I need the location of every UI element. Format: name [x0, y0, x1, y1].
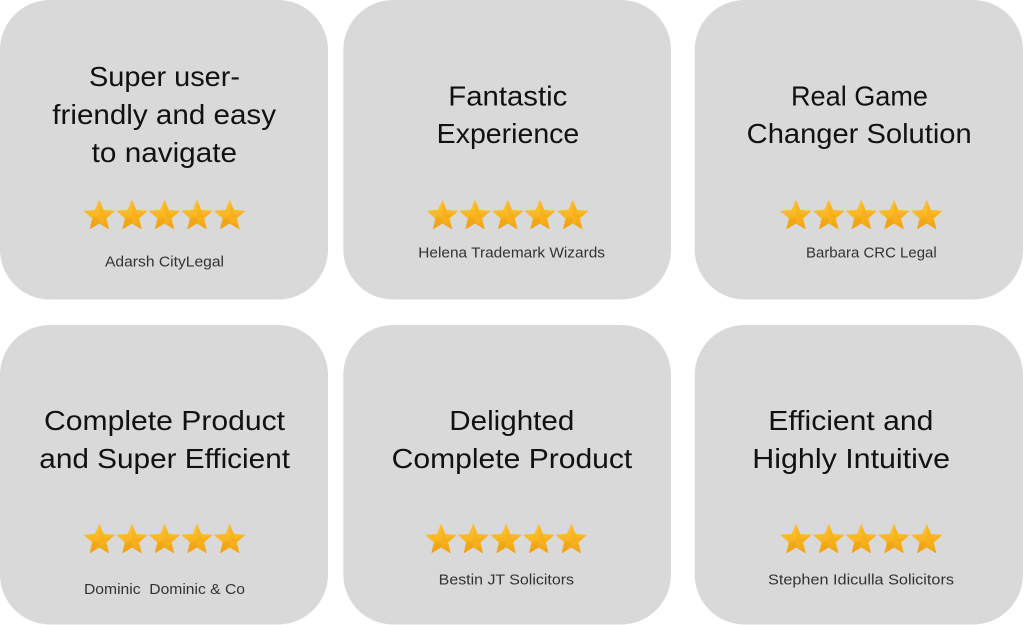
panel: review card 1	[0, 0, 328, 300]
heading: Delighted Complete Product: Delighted	[449, 405, 574, 436]
heading: Real Game Changer Solution: Changer Solution	[747, 118, 972, 149]
panel: review card 6	[695, 325, 1023, 624]
card background	[0, 325, 328, 624]
panel: review card 4	[0, 325, 328, 624]
icon: five star rating	[84, 524, 245, 553]
heading: Real Game Changer Solution	[747, 80, 972, 149]
heading: Efficient and Highly Intuitive: Highly Intuitive	[752, 443, 950, 474]
icon: five star rating	[781, 524, 942, 553]
icon: five star rating	[781, 200, 942, 229]
heading: Super user-friendly and easy to navigate: friendly and easy	[52, 99, 276, 130]
reviewer name: Stephen Idiculla Solicitors	[768, 571, 954, 588]
icon: five star rating	[428, 200, 588, 229]
heading: Complete Product and Super Efficient: and Super Efficient	[39, 443, 290, 474]
heading: Super user-friendly and easy to navigate: to navigate	[92, 137, 237, 168]
card background	[0, 0, 328, 300]
card background	[695, 0, 1023, 300]
reviewer name: Dominic Dominic & Co	[84, 581, 245, 598]
reviewer name: Helena Trademark Wizards	[418, 244, 605, 261]
heading: Delighted Complete Product	[392, 405, 633, 474]
heading: Efficient and Highly Intuitive	[752, 405, 950, 474]
panel: review card 2	[343, 0, 671, 300]
icon: five star rating	[426, 524, 586, 553]
heading: Fantastic Experience: Fantastic	[448, 80, 567, 112]
heading: Real Game Changer Solution: Real Game	[791, 80, 928, 112]
heading: Efficient and Highly Intuitive: Efficient and	[768, 405, 933, 436]
reviewer name: Barbara CRC Legal	[806, 244, 937, 261]
heading: Complete Product and Super Efficient: Complete Product	[44, 405, 285, 436]
card background	[343, 325, 671, 624]
heading: Fantastic Experience	[437, 80, 579, 149]
heading: Delighted Complete Product: Complete Product	[392, 443, 633, 474]
panel: review card 3	[695, 0, 1023, 300]
heading: Super user-friendly and easy to navigate	[52, 61, 276, 168]
heading: Complete Product and Super Efficient	[39, 405, 290, 474]
reviewer name: Adarsh CityLegal	[105, 254, 224, 270]
heading: Super user-friendly and easy to navigate: Super user-	[89, 61, 240, 92]
heading: Fantastic Experience: Experience	[437, 118, 579, 149]
panel: review card 5	[343, 325, 671, 624]
reviewer name: Bestin JT Solicitors	[439, 571, 574, 588]
card background	[695, 325, 1023, 624]
card background	[343, 0, 671, 300]
icon: five star rating	[84, 200, 245, 229]
